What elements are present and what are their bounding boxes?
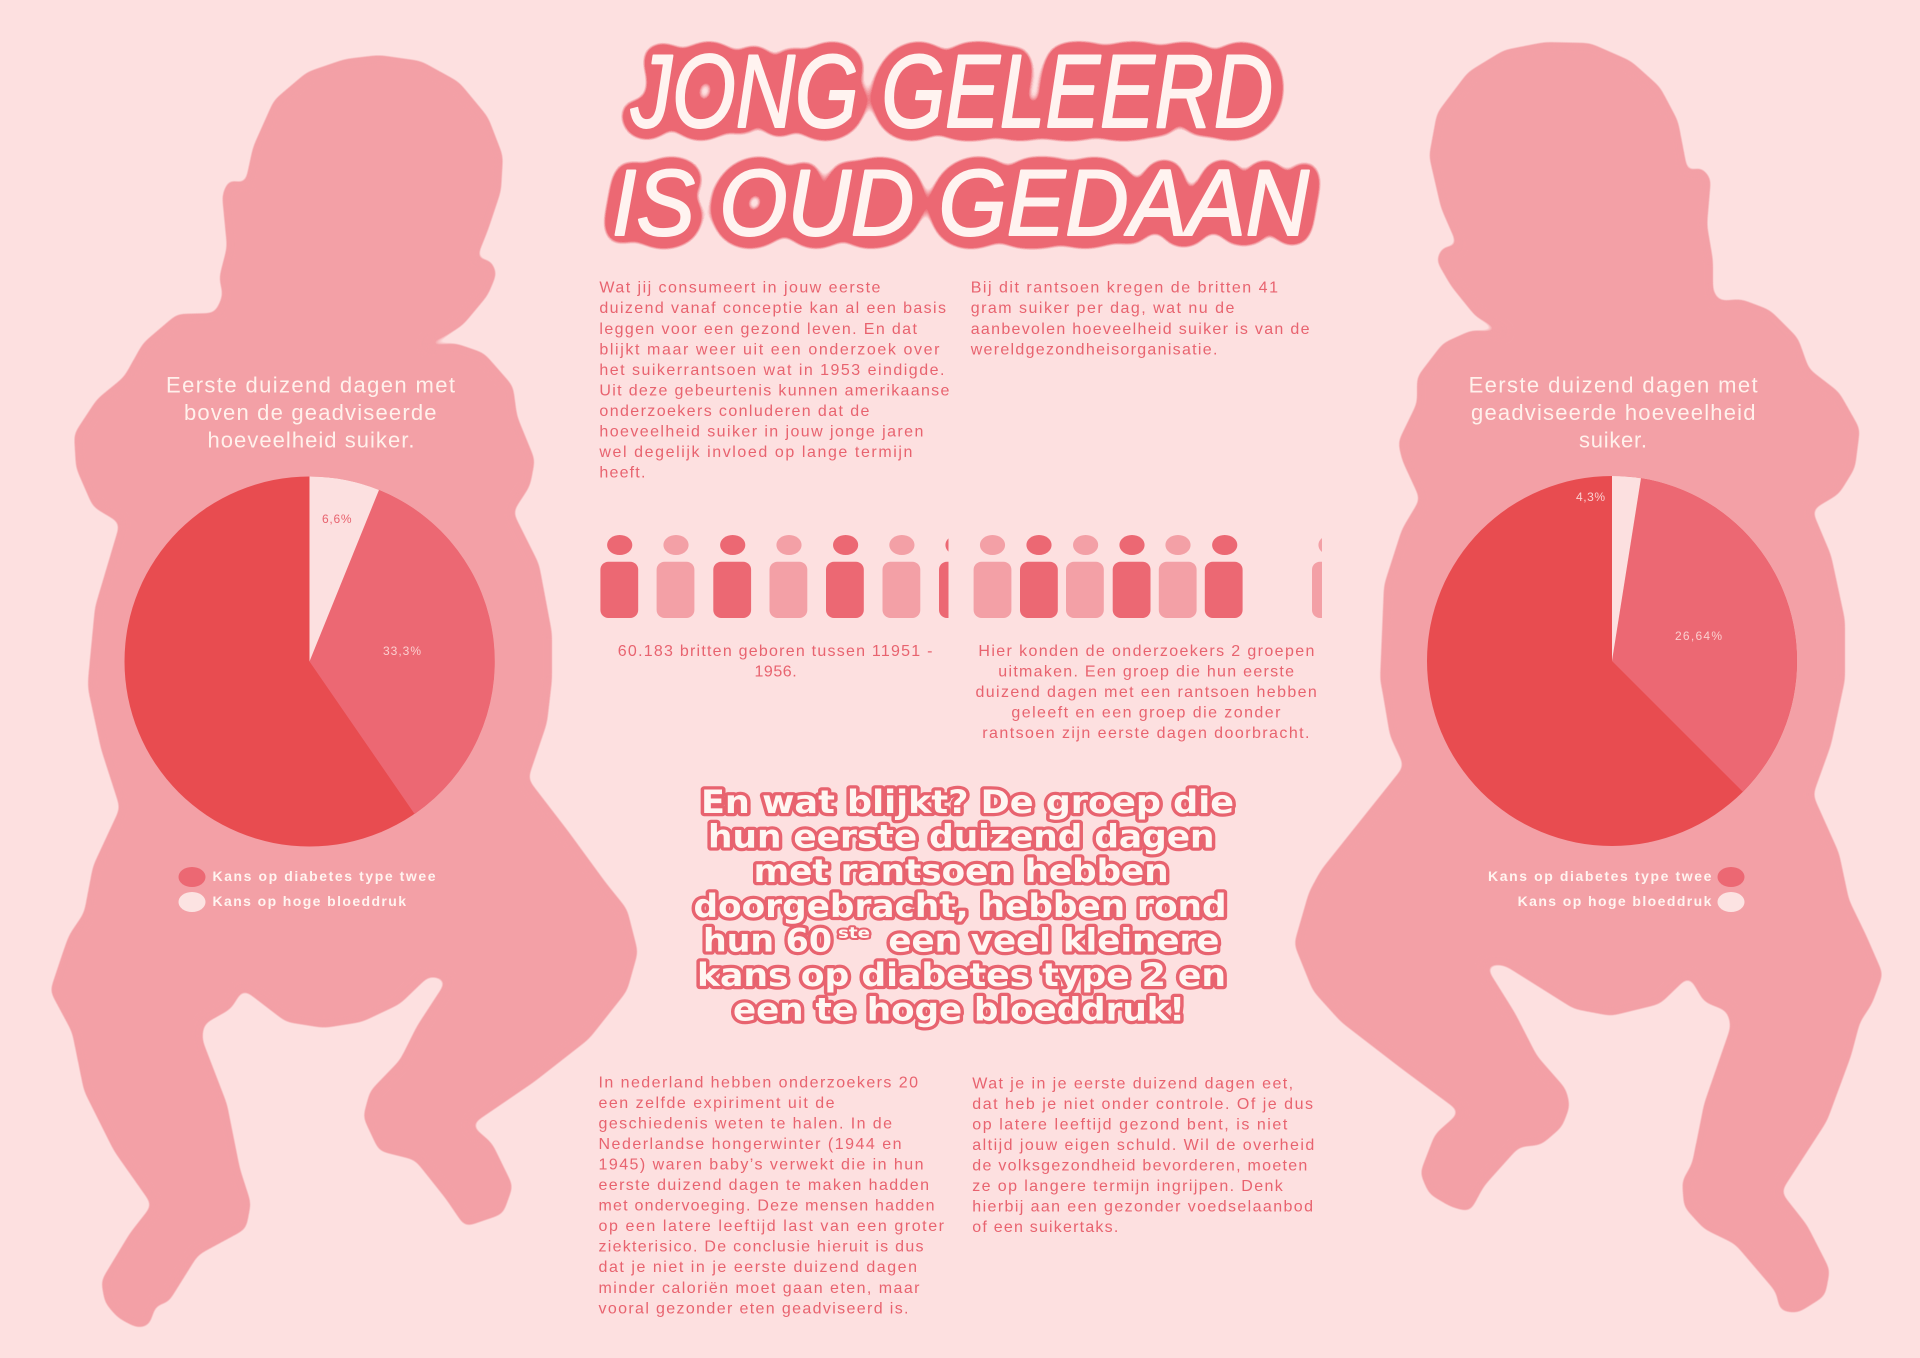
text block: intro column 1: leggen voor een gezond leven. En dat [599, 321, 917, 338]
callout [694, 783, 1234, 1029]
text block: bottom column 1: dat je niet in je eerste duizend dagen [598, 1259, 917, 1276]
left chart heading: boven de geadviseerde [184, 400, 436, 425]
text block: bottom column 1: geschiedenis weten te halen. In de [598, 1115, 892, 1132]
text block: bottom column 1: eerste duizend dagen te maken hadden [598, 1177, 929, 1194]
text block: intro column 1: heeft. [599, 465, 645, 482]
callout: hun eerste duizend dagen [708, 818, 1214, 856]
right legend: Kans op hoge bloeddruk [1518, 893, 1712, 909]
callout: doorgebracht, hebben rond [694, 887, 1226, 925]
right pie chart [1427, 476, 1797, 846]
left legend: Kans op diabetes type twee [212, 868, 436, 884]
right chart heading [1469, 372, 1758, 452]
panel: left baby with pie chart [50, 55, 638, 1328]
text block: bottom column 2: ze op langere termijn ingrijpen. Denk [972, 1178, 1284, 1195]
right legend [1488, 867, 1744, 912]
callout: hun 60 [703, 921, 832, 959]
title: JONG GELEERD [630, 34, 1273, 150]
text block: intro column 1 [598, 280, 949, 482]
caption: britten [618, 643, 932, 681]
text block: intro column 2 [970, 280, 1310, 358]
panel: right baby with pie chart [1294, 42, 1883, 1313]
text block: intro column 1: onderzoekers conluderen dat de [599, 403, 869, 420]
text block: bottom column 2: op latere leeftijd gezond bent, is niet [972, 1116, 1288, 1133]
text block: bottom column 1: een zelfde expiriment uit de [598, 1095, 835, 1112]
text block: intro column 1: Wat jij consumeert in jouw eerste [599, 280, 880, 297]
text block: bottom column 2: de volksgezondheid bevorderen, moeten [972, 1158, 1307, 1174]
text block: bottom column 1: In nederland hebben onderzoekers 20 [598, 1074, 918, 1091]
text block: intro column 1: blijkt maar weer uit een onderzoek over [599, 341, 940, 358]
text block: bottom column 2: dat heb je niet onder controle. Of je dus [972, 1096, 1313, 1113]
text block: intro column 1: Uit deze gebeurtenis kunnen amerikaanse [599, 382, 949, 399]
caption: groepen: uitmaken. Een groep die hun eerste [998, 664, 1294, 681]
text block: intro column 1: het suikerrantsoen wat in 1953 eindigde. [599, 362, 944, 379]
text block: bottom column 1: ziekterisico. De conclusie hieruit is dus [598, 1239, 924, 1256]
callout: ste [838, 924, 870, 942]
text block: bottom column 2: hierbij aan een gezonder voedselaanbod [972, 1199, 1313, 1216]
title [612, 34, 1309, 255]
left chart heading: hoeveelheid suiker. [208, 428, 414, 452]
text block: bottom column 2: of een suikertaks. [972, 1219, 1118, 1236]
caption: britten: 1956. [754, 664, 797, 681]
text block: intro column 2: wereldgezondheisorganisatie. [970, 341, 1217, 358]
text block: bottom column 2: altijd jouw eigen schuld. Wil de overheid [972, 1137, 1314, 1154]
callout: kans op diabetes type 2 en [697, 956, 1226, 994]
right pie chart: 26,64% [1675, 629, 1722, 643]
left pie chart [124, 476, 495, 846]
right pie chart: 4,3% [1576, 490, 1605, 504]
pictogram: people row right [974, 535, 1350, 618]
text block: intro column 1: wel degelijk invloed op lange termijn [598, 444, 912, 461]
right baby silhouette [1294, 42, 1883, 1313]
callout: een veel kleinere [888, 921, 1219, 959]
left baby silhouette [50, 55, 638, 1328]
caption: groepen: duizend dagen met een rantsoen hebben [976, 684, 1317, 701]
left pie chart: 33,3% [383, 644, 421, 658]
callout: een te hoge bloeddruk! [733, 991, 1185, 1029]
text block: bottom column 2 [972, 1075, 1314, 1236]
text block: intro column 2: Bij dit rantsoen kregen de britten 41 [971, 280, 1278, 297]
text block: intro column 2: gram suiker per dag, wat nu de [971, 300, 1234, 317]
caption: groepen: Hier konden de onderzoekers 2 groepen [978, 643, 1314, 660]
caption: groepen: geleeft en een groep die zonder [1011, 705, 1281, 722]
text block: bottom column 2: Wat je in je eerste duizend dagen eet, [972, 1075, 1293, 1092]
left legend [178, 867, 436, 912]
caption: groepen [976, 643, 1317, 742]
text block: intro column 2: aanbevolen hoeveelheid suiker is van de [971, 321, 1310, 338]
callout: En wat blijkt? De groep die [701, 783, 1234, 821]
right chart heading: suiker. [1579, 428, 1647, 452]
left legend: Kans op hoge bloeddruk [212, 893, 406, 909]
right legend: Kans op diabetes type twee [1488, 868, 1712, 884]
caption: groepen: rantsoen zijn eerste dagen doorbracht. [982, 725, 1310, 742]
left pie chart: 6,6% [322, 512, 352, 526]
pictogram: people row left [600, 535, 977, 618]
text block: bottom column 1: met ondervoeging. Deze mensen hadden [598, 1198, 934, 1215]
text block: bottom column 1: 1945) waren baby’s verwekt die in hun [598, 1156, 924, 1174]
left chart heading [166, 372, 455, 452]
text block: bottom column 1: op een latere leeftijd last van een groter [598, 1218, 945, 1235]
right chart heading: geadviseerde hoeveelheid [1471, 400, 1756, 425]
text block: intro column 1: hoeveelheid suiker in jouw jonge jaren [599, 424, 923, 440]
text block: bottom column 1: minder caloriën moet gaan eten, maar [598, 1280, 920, 1297]
text block: bottom column 1: vooral gezonder eten geadviseerd is. [598, 1300, 908, 1317]
text block: intro column 1: duizend vanaf conceptie kan al een basis [599, 300, 946, 317]
title: IS OUD GEDAAN [612, 150, 1309, 255]
text block: bottom column 1: Nederlandse hongerwinter (1944 en [598, 1136, 902, 1153]
left chart heading: Eerste duizend dagen met [166, 372, 455, 398]
right chart heading: Eerste duizend dagen met [1469, 372, 1758, 398]
callout: met rantsoen hebben [754, 852, 1169, 890]
text block: bottom column 1 [598, 1074, 945, 1317]
caption: britten: 60.183 britten geboren tussen 11951 - [618, 643, 932, 660]
